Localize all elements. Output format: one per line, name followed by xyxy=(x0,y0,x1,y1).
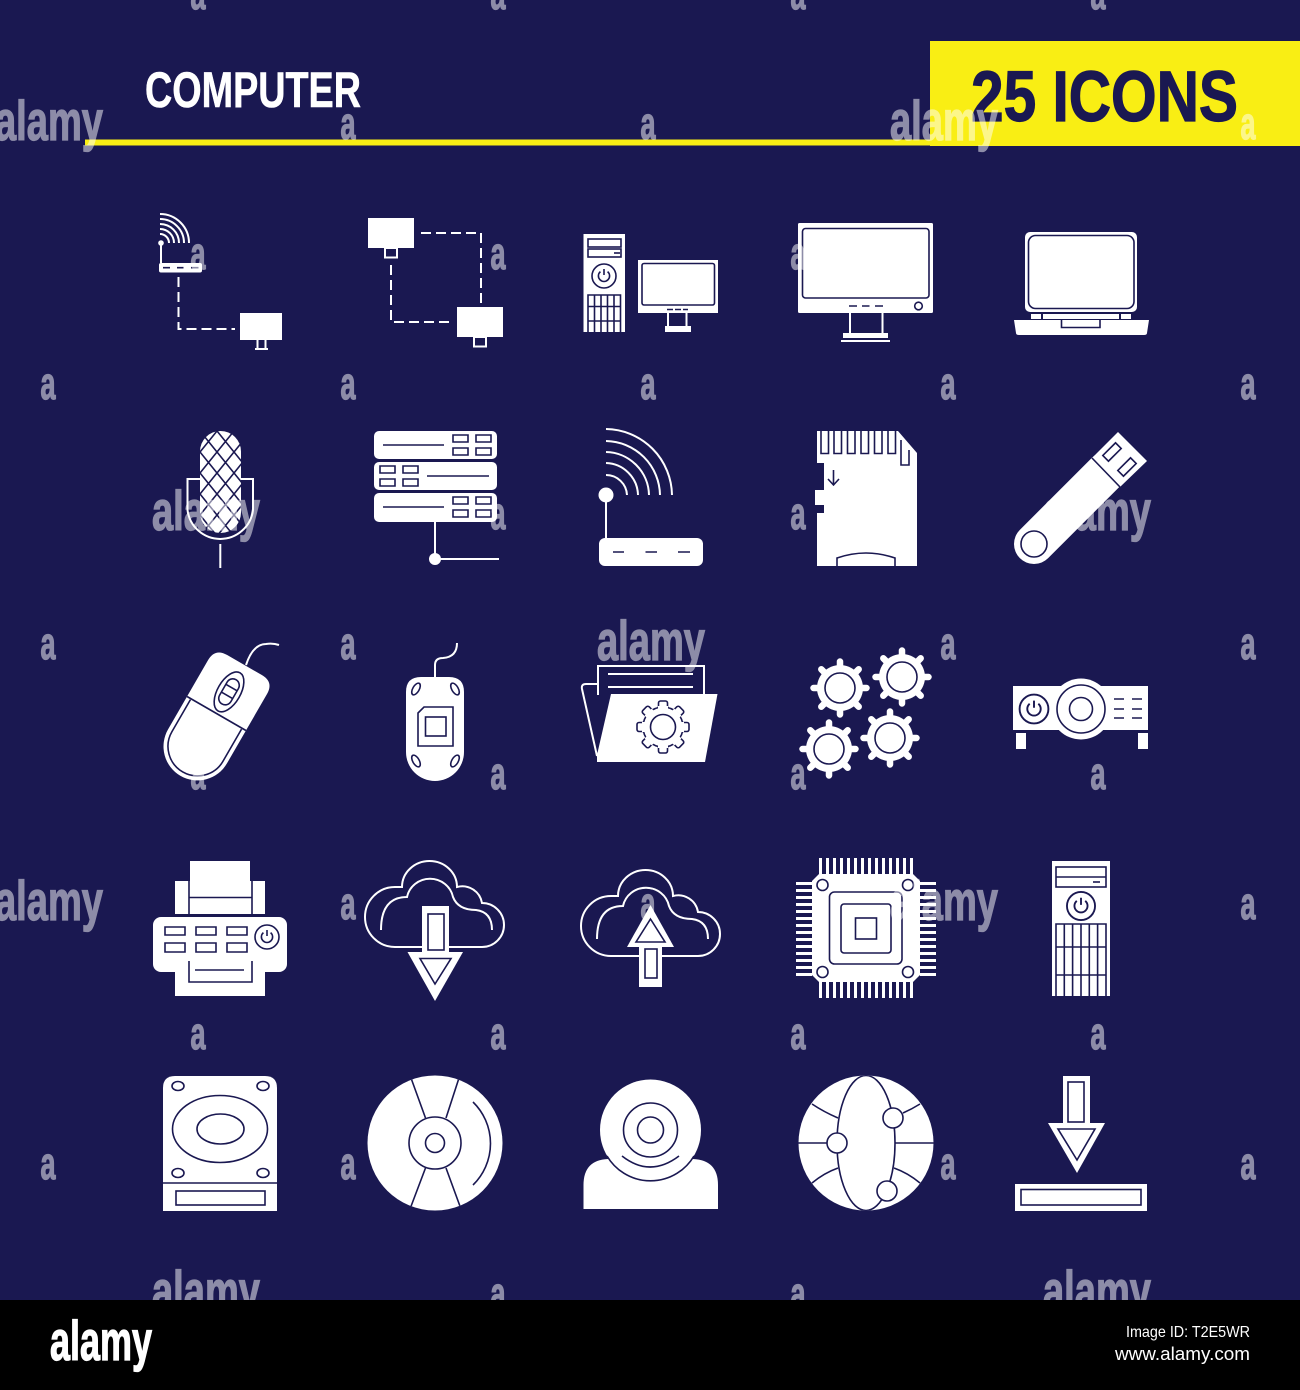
watermark pattern: a xyxy=(940,358,956,409)
icon: four gears xyxy=(802,650,928,776)
icon: compact disc xyxy=(368,1076,502,1210)
watermark pattern: a xyxy=(340,98,356,149)
watermark pattern: a xyxy=(1240,98,1256,149)
watermark pattern: a xyxy=(340,618,356,669)
icon: printer xyxy=(153,861,287,996)
icon: webcam xyxy=(584,1080,718,1209)
watermark pattern: a xyxy=(40,618,56,669)
watermark pattern: alamy xyxy=(1043,1259,1151,1322)
watermark pattern: a xyxy=(1240,358,1256,409)
watermark pattern: a xyxy=(790,1268,806,1319)
icon: computer tower xyxy=(1052,861,1110,996)
icon: globe network xyxy=(798,1076,934,1210)
watermark pattern: a xyxy=(640,358,656,409)
header: icon count badge: 25 ICONS xyxy=(971,58,1238,137)
footer: alamy logo: alamy xyxy=(50,1309,152,1372)
watermark pattern: a xyxy=(190,1008,206,1059)
watermark pattern: a xyxy=(40,1138,56,1189)
watermark pattern: a xyxy=(790,228,806,279)
icon: monitor xyxy=(798,223,933,342)
watermark pattern: alamy xyxy=(1043,479,1151,542)
watermark pattern: a xyxy=(1240,878,1256,929)
icon: laptop xyxy=(1014,232,1149,335)
icon: projector xyxy=(1013,678,1148,749)
watermark pattern: a xyxy=(1090,748,1106,799)
watermark pattern: a xyxy=(790,488,806,539)
watermark pattern: a xyxy=(340,358,356,409)
watermark pattern: a xyxy=(790,748,806,799)
watermark pattern: a xyxy=(640,98,656,149)
footer bar xyxy=(0,1300,1300,1390)
icon: settings folder xyxy=(582,666,718,762)
watermark pattern: a xyxy=(1240,618,1256,669)
watermark pattern: a xyxy=(490,1268,506,1319)
watermark pattern: a xyxy=(190,228,206,279)
icon: two monitors linked in a loop xyxy=(368,218,503,346)
watermark pattern: a xyxy=(940,618,956,669)
watermark pattern: alamy xyxy=(890,89,998,152)
watermark pattern: alamy xyxy=(890,869,998,932)
icon: download to tray xyxy=(1015,1076,1147,1211)
icon: mouse underside xyxy=(406,643,464,781)
watermark pattern: a xyxy=(490,748,506,799)
watermark pattern: a xyxy=(1090,1008,1106,1059)
watermark pattern: a xyxy=(340,1138,356,1189)
header: title: COMPUTER xyxy=(145,62,361,118)
watermark pattern: a xyxy=(1240,1138,1256,1189)
icon: USB flash drive xyxy=(1021,432,1147,557)
footer: image id: Image ID: T2E5WR xyxy=(1126,1324,1250,1341)
icon: server rack xyxy=(374,431,499,565)
icon: microphone xyxy=(188,431,253,568)
watermark pattern: a xyxy=(40,358,56,409)
watermark pattern: alamy xyxy=(152,479,260,542)
icon: cloud upload xyxy=(581,870,720,987)
header: icon count badge xyxy=(930,41,1300,146)
watermark pattern: a xyxy=(190,748,206,799)
watermark pattern: a xyxy=(490,1008,506,1059)
watermark pattern: a xyxy=(490,488,506,539)
header: yellow rule xyxy=(85,140,931,146)
icon: SD memory card xyxy=(815,431,917,566)
icon: CPU chip xyxy=(804,866,928,990)
icon: mouse angled xyxy=(151,644,279,793)
icon: wifi router linked to monitor xyxy=(158,214,282,349)
footer: website: www.alamy.com xyxy=(1114,1344,1250,1364)
icon: wifi router xyxy=(598,429,703,566)
icon: cloud download xyxy=(365,861,504,1001)
icon: desktop tower and monitor xyxy=(584,234,718,332)
watermark pattern: alamy xyxy=(152,1259,260,1322)
watermark pattern: a xyxy=(940,1138,956,1189)
watermark pattern: a xyxy=(790,1008,806,1059)
watermark pattern: a xyxy=(640,878,656,929)
watermark pattern: a xyxy=(490,228,506,279)
icon: hard disk drive xyxy=(163,1076,277,1211)
watermark pattern: a xyxy=(340,878,356,929)
watermark pattern: alamy xyxy=(597,609,705,672)
